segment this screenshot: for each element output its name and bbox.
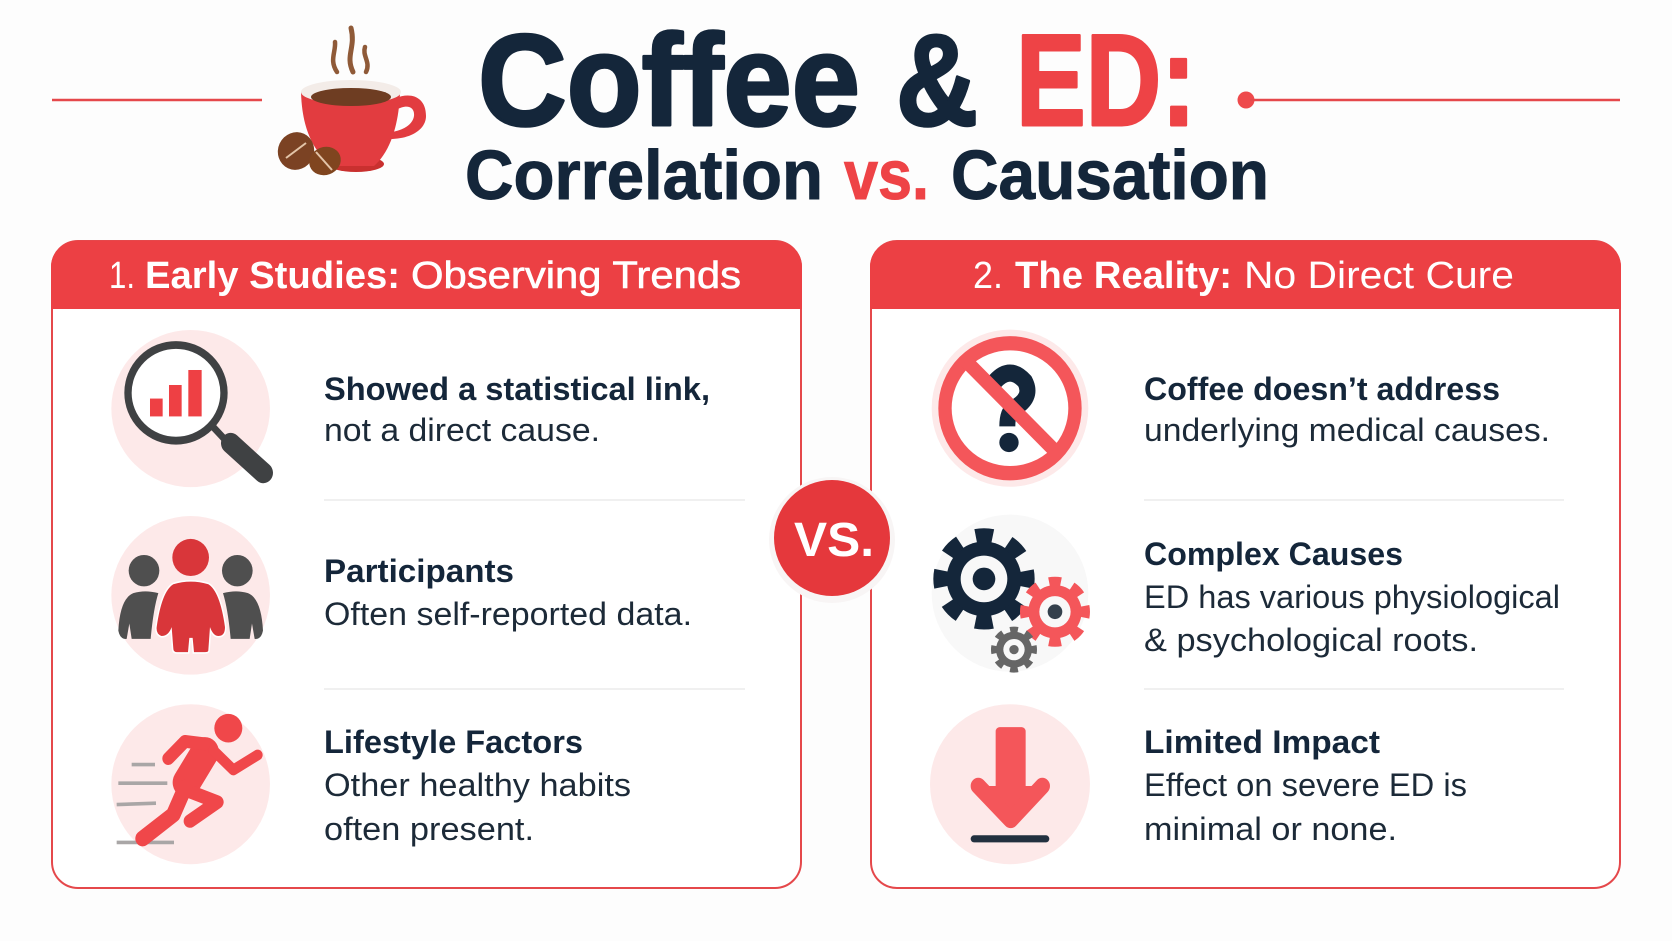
icon: crossed-out question mark bbox=[932, 330, 1088, 487]
text: lifestyle factors bbox=[324, 724, 631, 847]
panel heading: early studies: Early Studies: bbox=[145, 255, 400, 297]
icon: participants bbox=[111, 516, 270, 675]
subtitle bbox=[465, 136, 1269, 214]
text: underlying causes bbox=[1144, 371, 1550, 448]
text: participants bbox=[324, 553, 692, 632]
text: lifestyle factors: Other healthy habits bbox=[324, 767, 631, 803]
text: participants: Often self-reported data. bbox=[324, 596, 692, 632]
subtitle: vs. bbox=[844, 136, 929, 214]
text: limited impact: Effect on severe ED is bbox=[1144, 767, 1467, 803]
text: underlying causes: Coffee doesn’t address bbox=[1144, 371, 1500, 407]
icon: down arrow bbox=[930, 704, 1090, 864]
text: limited impact bbox=[1144, 724, 1467, 847]
text: complex causes: & psychological roots. bbox=[1144, 622, 1478, 658]
header rule left bbox=[52, 99, 262, 101]
title: & bbox=[896, 7, 978, 153]
icon: gears bbox=[932, 515, 1088, 672]
text: complex causes: ED has various physiological bbox=[1144, 579, 1560, 615]
panel heading: early studies: 1. bbox=[109, 255, 135, 297]
subtitle: Correlation bbox=[465, 136, 823, 214]
title: ED: bbox=[1016, 7, 1196, 153]
panel heading: early studies: Observing Trends bbox=[411, 255, 741, 297]
icon: coffee cup with beans bbox=[272, 28, 426, 180]
text: statistical link: Showed a statistical link, bbox=[324, 371, 710, 407]
text: complex causes bbox=[1144, 536, 1560, 658]
title bbox=[478, 7, 1196, 153]
text: participants: Participants bbox=[324, 553, 514, 589]
text: lifestyle factors: often present. bbox=[324, 811, 534, 847]
text: limited impact: Limited Impact bbox=[1144, 724, 1380, 760]
text: lifestyle factors: Lifestyle Factors bbox=[324, 724, 583, 760]
panel heading: the reality: 2. bbox=[973, 255, 1003, 297]
vs badge: VS. bbox=[794, 514, 874, 567]
text: statistical link: not a direct cause. bbox=[324, 412, 600, 448]
panel: the reality bbox=[870, 241, 1621, 888]
subtitle: Causation bbox=[951, 136, 1269, 214]
panel heading: the reality bbox=[870, 241, 1621, 309]
text: statistical link bbox=[324, 371, 710, 448]
icon: magnifier with bar chart bbox=[111, 330, 270, 487]
text: underlying causes: underlying medical causes. bbox=[1144, 412, 1550, 448]
panel heading: the reality: No Direct Cure bbox=[1244, 255, 1514, 297]
panel heading: the reality: The Reality: bbox=[1015, 255, 1232, 297]
header rule right with dot bbox=[1238, 92, 1620, 108]
title: Coffee bbox=[478, 7, 860, 153]
icon: running figure bbox=[111, 704, 270, 864]
panel heading: early studies bbox=[51, 241, 802, 309]
vs badge bbox=[769, 477, 895, 603]
text: complex causes: Complex Causes bbox=[1144, 536, 1403, 572]
panel: early studies bbox=[51, 241, 802, 888]
text: limited impact: minimal or none. bbox=[1144, 811, 1397, 847]
